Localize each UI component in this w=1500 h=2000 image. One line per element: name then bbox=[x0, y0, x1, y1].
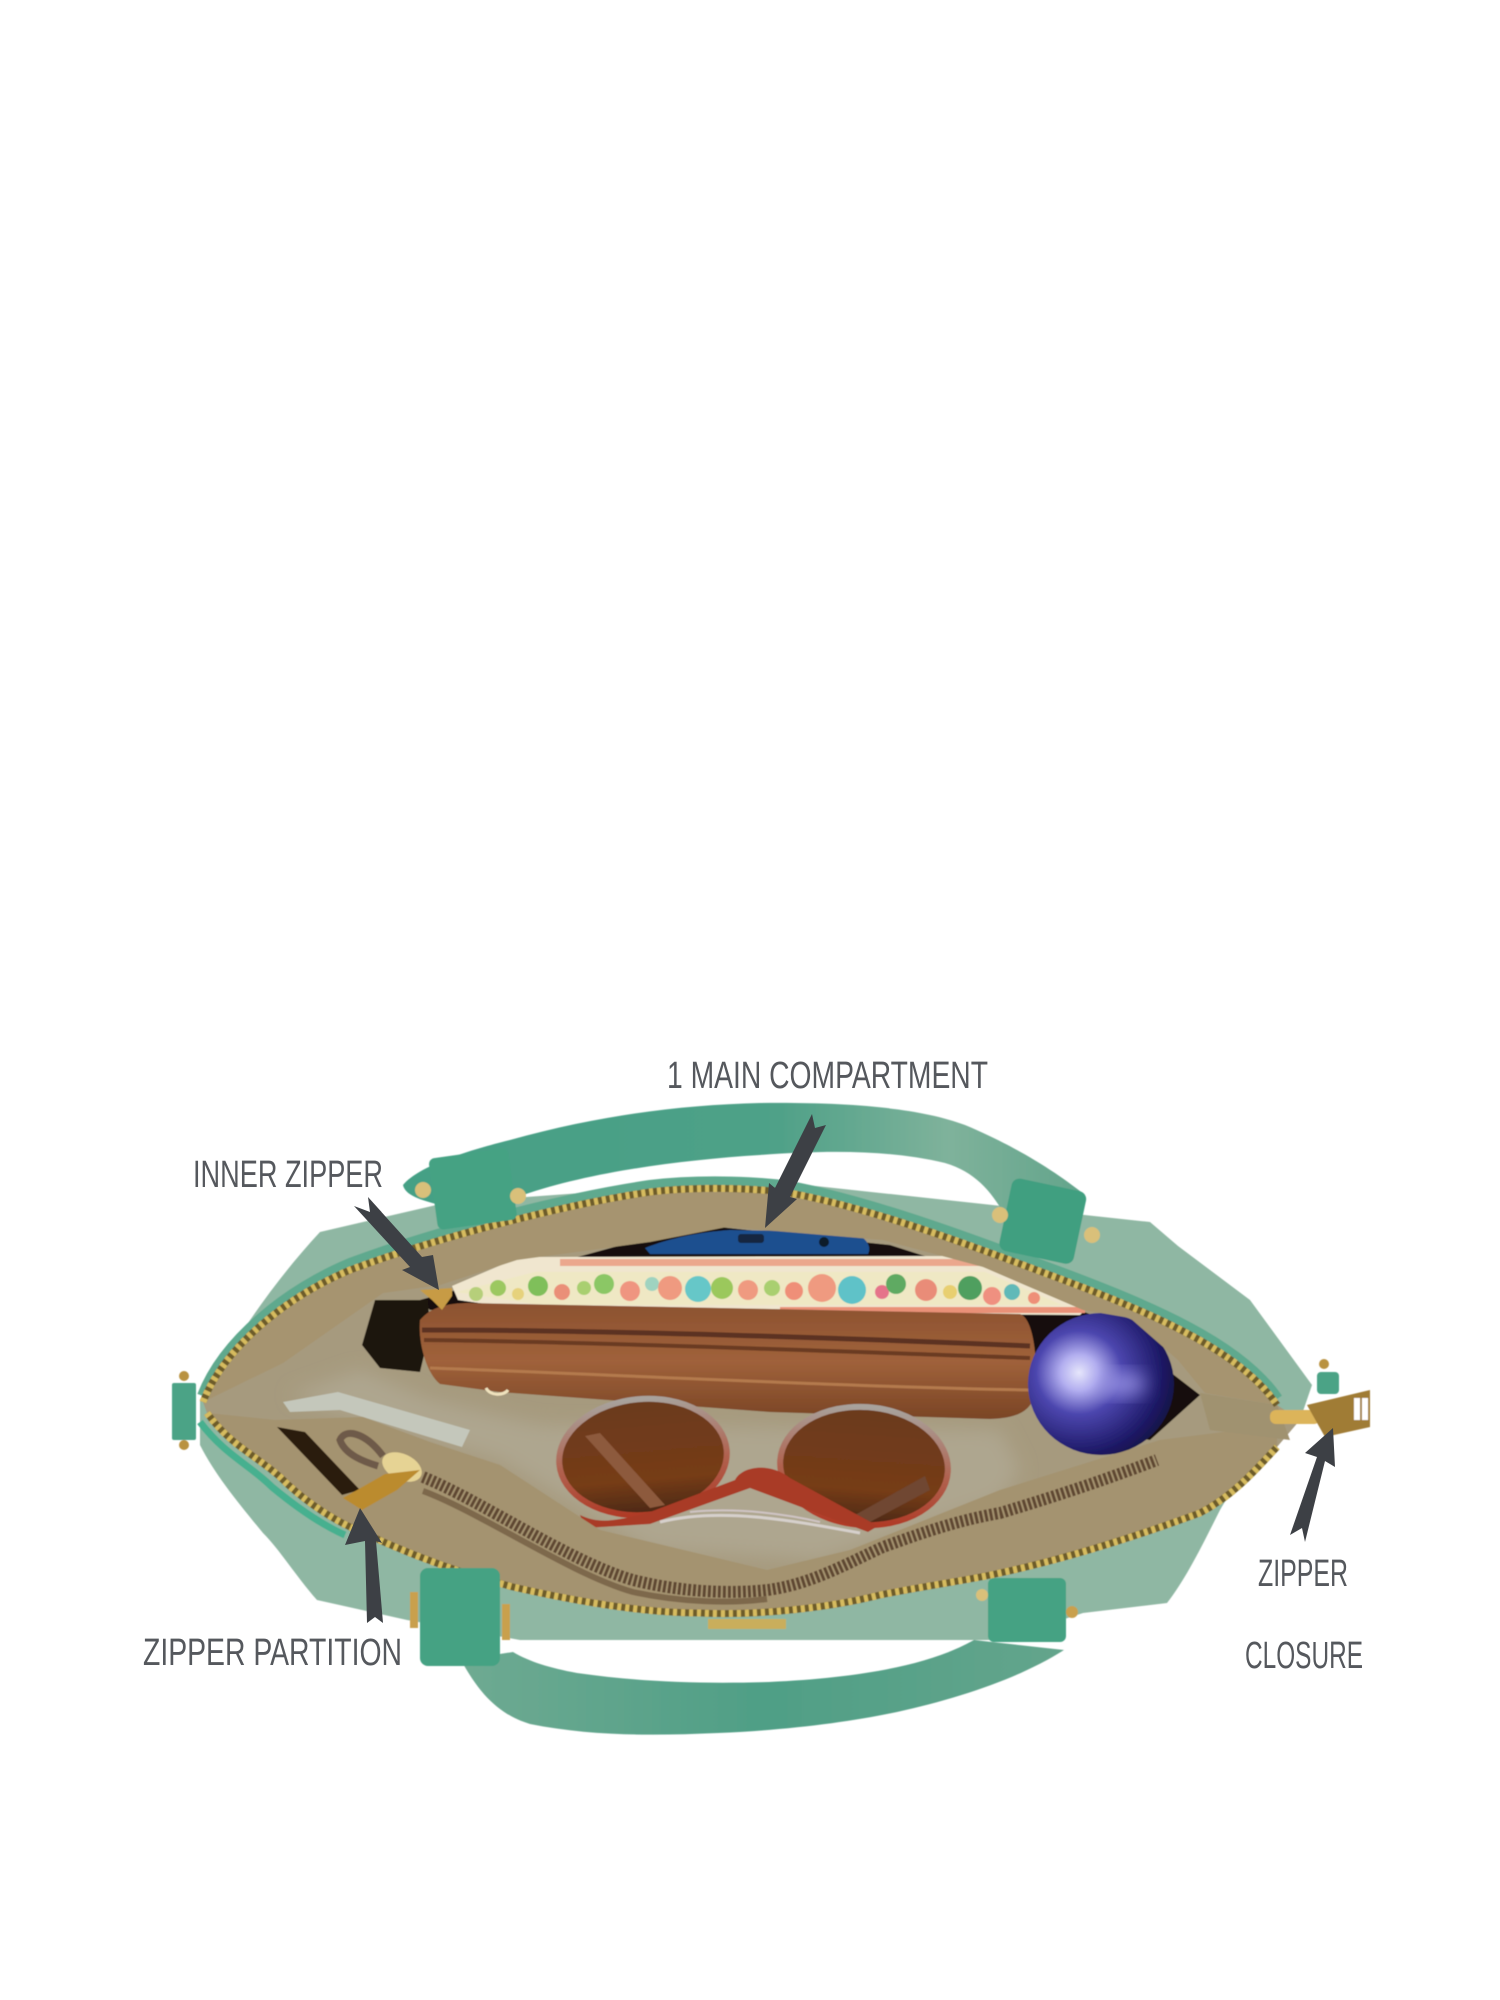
purple compact ball bbox=[1028, 1313, 1174, 1455]
phone bbox=[645, 1230, 869, 1254]
right strap tab upper bbox=[992, 1177, 1100, 1265]
pocket zipper bbox=[423, 1460, 1157, 1592]
label: zipper partition: ZIPPER PARTITION bbox=[143, 1632, 402, 1674]
wallet seam bbox=[430, 1368, 1030, 1390]
top zipper teeth backing bbox=[203, 1188, 1277, 1405]
notebook bbox=[452, 1256, 1090, 1315]
shadow behind notebook bbox=[420, 1225, 1200, 1440]
left strap tab upper bbox=[415, 1148, 526, 1230]
handbag photo illustration bbox=[172, 1103, 1370, 1735]
green zipper tape bbox=[203, 1182, 1277, 1399]
label: zipper: ZIPPER bbox=[1258, 1553, 1348, 1595]
lining light patch bbox=[290, 1370, 1020, 1560]
right temple arm bbox=[855, 1476, 930, 1522]
brown wallet bbox=[420, 1303, 1036, 1419]
left strap tab lower bbox=[410, 1568, 510, 1666]
right side tab bbox=[1317, 1359, 1339, 1394]
arrow: main compartment bbox=[765, 1114, 826, 1228]
right fold bbox=[1200, 1393, 1290, 1440]
bottom pink trim bbox=[780, 1307, 1085, 1313]
pocket opening bbox=[277, 1427, 360, 1495]
flower motifs bbox=[469, 1274, 1040, 1305]
wallet zipper bbox=[422, 1330, 1030, 1346]
sunglasses bbox=[554, 1392, 952, 1533]
floral band bbox=[456, 1272, 1062, 1305]
shadow left of wallet bbox=[362, 1300, 430, 1372]
ball highlight bbox=[1098, 1372, 1146, 1396]
bridge and lower frame bbox=[580, 1468, 878, 1532]
zipper pull left bbox=[343, 1446, 427, 1510]
top zipper teeth bbox=[203, 1188, 1277, 1405]
label: closure: CLOSURE bbox=[1245, 1635, 1363, 1677]
left side tab bbox=[172, 1371, 196, 1450]
lower zipper pocket bbox=[207, 1413, 1277, 1614]
plastic sheet bbox=[283, 1392, 470, 1447]
lining interior bbox=[203, 1188, 1300, 1614]
top flap bbox=[203, 1188, 1277, 1405]
lower zipper teeth backing bbox=[207, 1413, 1277, 1614]
left temple arm bbox=[585, 1433, 665, 1508]
pocket flap bbox=[207, 1413, 1277, 1614]
lower green tape bbox=[200, 1422, 345, 1535]
label: 1 main compartment: 1 MAIN COMPARTMENT bbox=[667, 1055, 988, 1097]
dark pocket shadows bbox=[362, 1225, 1200, 1440]
top pink trim bbox=[560, 1259, 980, 1266]
bottom handle bbox=[461, 1640, 1064, 1735]
left lens bbox=[554, 1392, 732, 1522]
arrow: zipper closure bbox=[1290, 1428, 1335, 1542]
right lens bbox=[776, 1401, 952, 1531]
bag body upper bbox=[200, 1180, 1312, 1640]
clear lens arms bbox=[660, 1515, 860, 1533]
wallet ring bbox=[486, 1388, 508, 1394]
arrow: inner zipper bbox=[354, 1197, 439, 1290]
inner zip ring bbox=[420, 1288, 452, 1310]
arrow: zipper partition bbox=[345, 1508, 383, 1623]
lower zipper teeth bbox=[207, 1413, 1277, 1614]
brand plate bbox=[708, 1619, 786, 1629]
zipper loop bbox=[340, 1433, 383, 1466]
label: inner zipper: INNER ZIPPER bbox=[193, 1154, 383, 1196]
top handle bbox=[403, 1103, 1085, 1215]
right strap tab lower bbox=[976, 1578, 1078, 1642]
zipper pull right bbox=[1270, 1390, 1370, 1437]
